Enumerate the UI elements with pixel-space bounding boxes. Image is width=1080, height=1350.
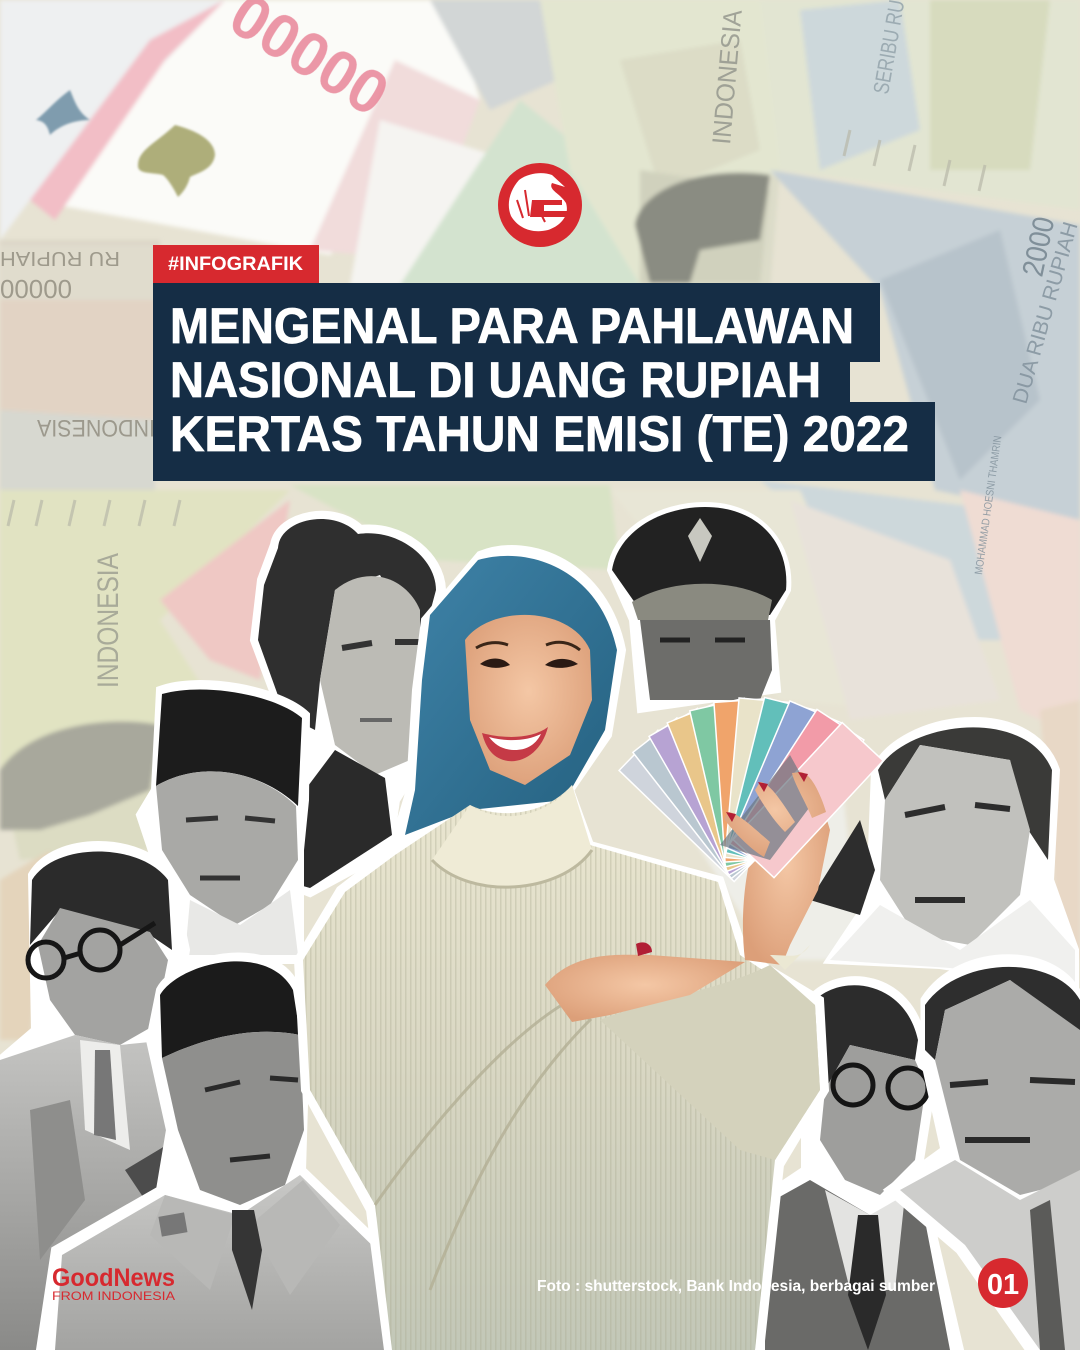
fingers over banknotes <box>724 772 826 857</box>
figure: officer with peaked cap <box>610 505 788 710</box>
figure: man at right with combed hair <box>810 721 1075 985</box>
open palm hand <box>545 955 745 1022</box>
logo badge <box>498 163 582 247</box>
background: banknote collage: 2000 <box>1017 214 1061 279</box>
brand: GoodNews from Indonesia: FROM INDONESIA <box>52 1289 175 1303</box>
eyes <box>480 658 578 668</box>
figure: central woman in sweater and blue hijab <box>298 549 883 1350</box>
figure: man with round glasses (suit) <box>0 845 195 1350</box>
tag: #INFOGRAFIK: #INFOGRAFIK <box>168 254 303 275</box>
sweater body <box>303 785 820 1350</box>
figure: man with peci in uniform <box>40 956 390 1350</box>
hijab <box>405 556 617 835</box>
background: banknote collage: 00000 <box>0 274 72 304</box>
brand: GoodNews from Indonesia <box>52 1264 175 1303</box>
background: banknote collage: INDONESIA <box>37 414 155 441</box>
photo credit: Foto : shutterstock, Bank Indonesia, berbagai sumber <box>537 1278 935 1295</box>
smile <box>482 727 548 761</box>
page number badge <box>978 1258 1028 1308</box>
background: banknote collage: INDONESIA <box>706 8 748 146</box>
brand: GoodNews from Indonesia: GoodNews <box>52 1264 175 1292</box>
figure: man with dark glasses and suit <box>745 980 960 1350</box>
title block <box>153 283 935 481</box>
turtleneck <box>432 785 592 887</box>
raised hand <box>743 780 830 965</box>
title block: NASIONAL DI UANG RUPIAH <box>170 352 821 408</box>
white cutout outline <box>298 549 825 1350</box>
title block: KERTAS TAHUN EMISI (TE) 2022 <box>170 406 909 462</box>
background: banknote collage: RU RUPIAH <box>0 247 120 269</box>
title block: MENGENAL PARA PAHLAWAN <box>170 298 854 354</box>
sleeve folds <box>375 1000 590 1290</box>
figure: older man at lower right <box>890 959 1080 1350</box>
figure: woman portrait with hair bun <box>255 516 441 892</box>
figure: man with black peci <box>140 684 306 960</box>
icon: orchid on banknote <box>36 90 215 197</box>
banknote fan <box>619 697 883 882</box>
face <box>465 615 592 785</box>
page number badge: 01 <box>987 1269 1019 1301</box>
background: banknote collage: DUA RIBU RUPIAH <box>1009 219 1080 406</box>
tag: #INFOGRAFIK <box>153 245 319 283</box>
background: banknote collage: MOHAMMAD HOESNI THAMRIN <box>973 435 1004 575</box>
background: banknote collage: INDONESIA <box>92 553 125 688</box>
